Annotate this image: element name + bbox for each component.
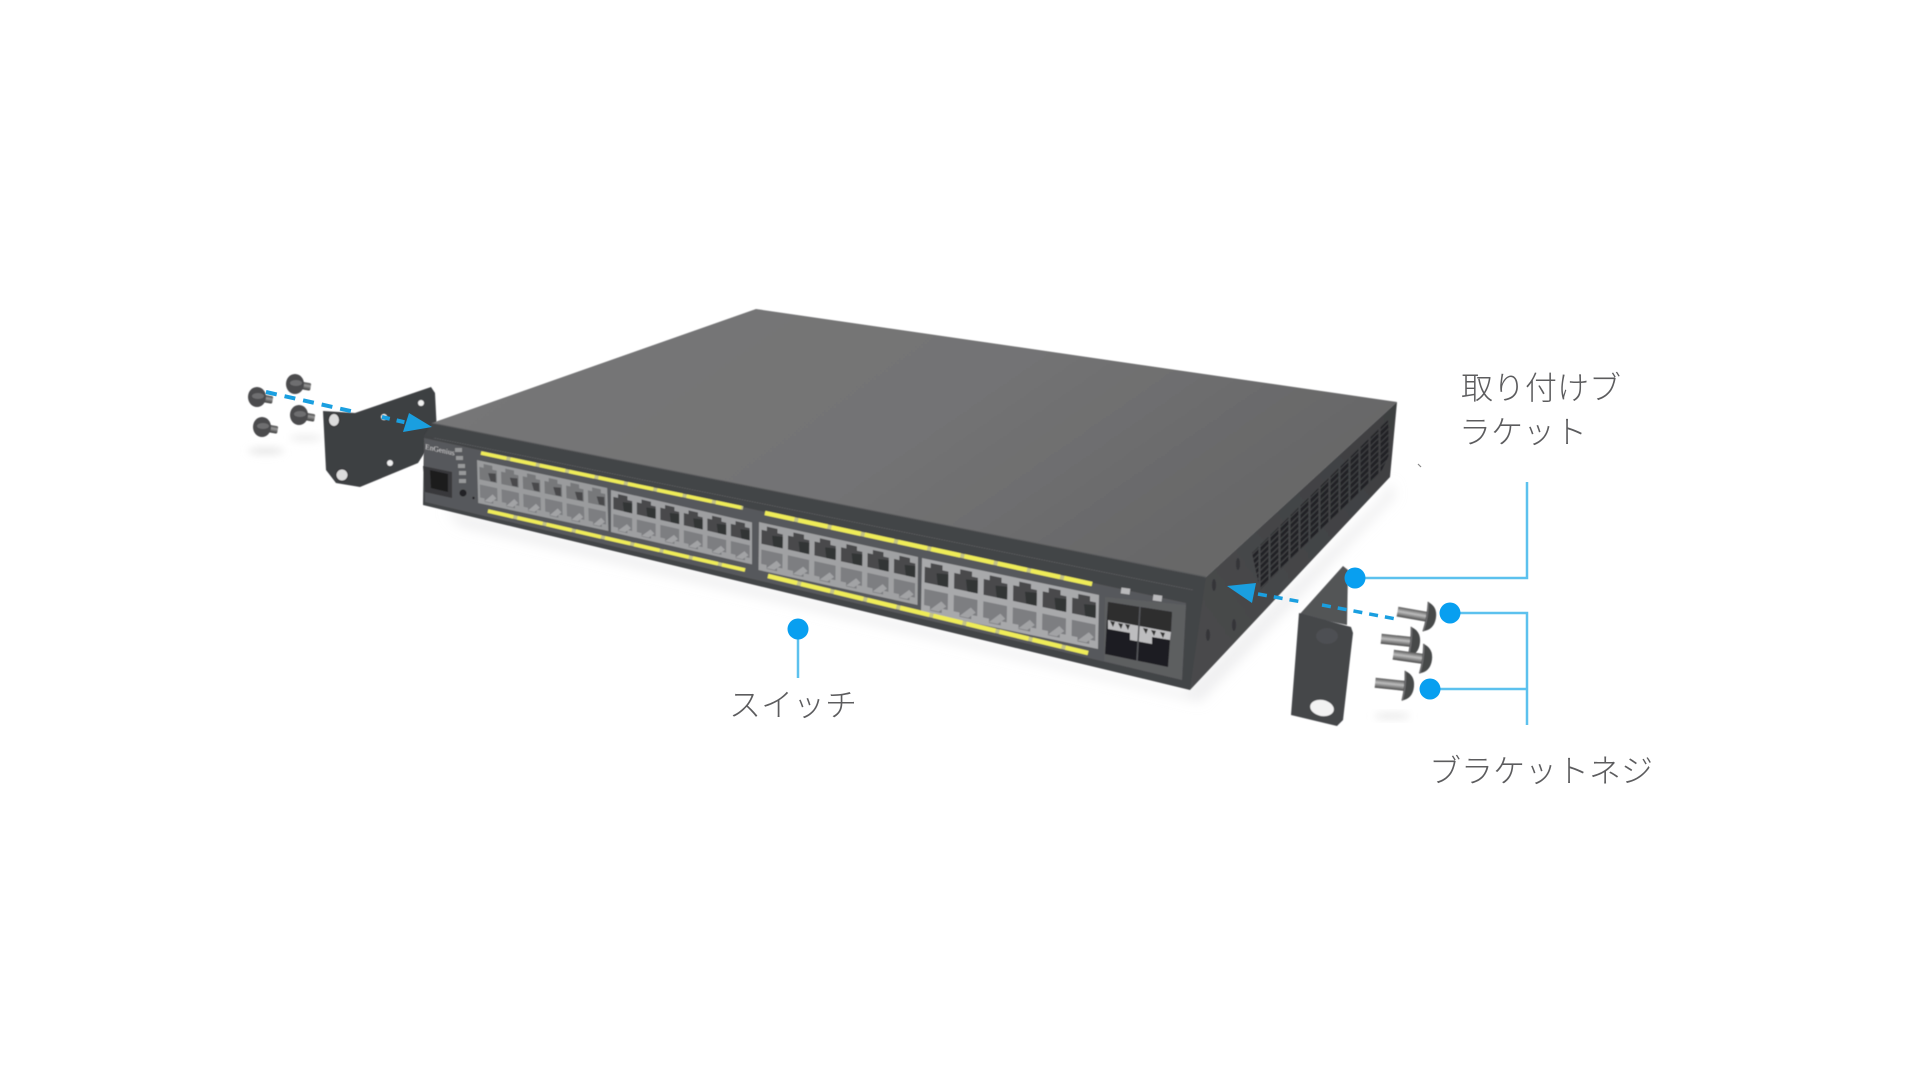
callout: switch xyxy=(788,618,808,678)
port block 3 xyxy=(758,522,918,605)
right screws xyxy=(1374,597,1438,702)
right mounting bracket xyxy=(1291,566,1353,726)
callout: bracket screws xyxy=(1420,602,1527,725)
console and logo area xyxy=(423,442,475,499)
switch front panel xyxy=(423,423,1206,690)
SFP module panel xyxy=(1104,587,1186,680)
switch top face xyxy=(432,309,1397,577)
left bracket shadows xyxy=(248,435,322,454)
left assembly arrow xyxy=(266,392,432,432)
switch ground shadow xyxy=(445,482,1395,702)
switch xyxy=(423,309,1397,690)
label: bracket screws: ブラケットネジ xyxy=(1429,753,1653,789)
label: mounting bracket: ラケット xyxy=(1459,414,1587,450)
left mounting bracket xyxy=(323,387,437,487)
label: switch: スイッチ xyxy=(729,687,857,723)
right bracket shadow xyxy=(1374,713,1410,719)
right assembly arrow xyxy=(1227,583,1396,619)
port block 4 xyxy=(921,558,1099,649)
switch side face with vents xyxy=(1190,402,1397,690)
port block 1 xyxy=(477,460,608,531)
stray speck xyxy=(1418,464,1421,467)
label: mounting bracket xyxy=(1459,370,1621,450)
callout: mounting bracket xyxy=(1344,482,1527,588)
logo: EnGenius xyxy=(425,442,455,457)
switch front chamfer xyxy=(424,423,1206,590)
left screws xyxy=(248,374,315,437)
port block 2 xyxy=(611,490,752,564)
yellow LED strips xyxy=(481,453,1092,653)
label: mounting bracket: 取り付けブ xyxy=(1461,370,1621,406)
